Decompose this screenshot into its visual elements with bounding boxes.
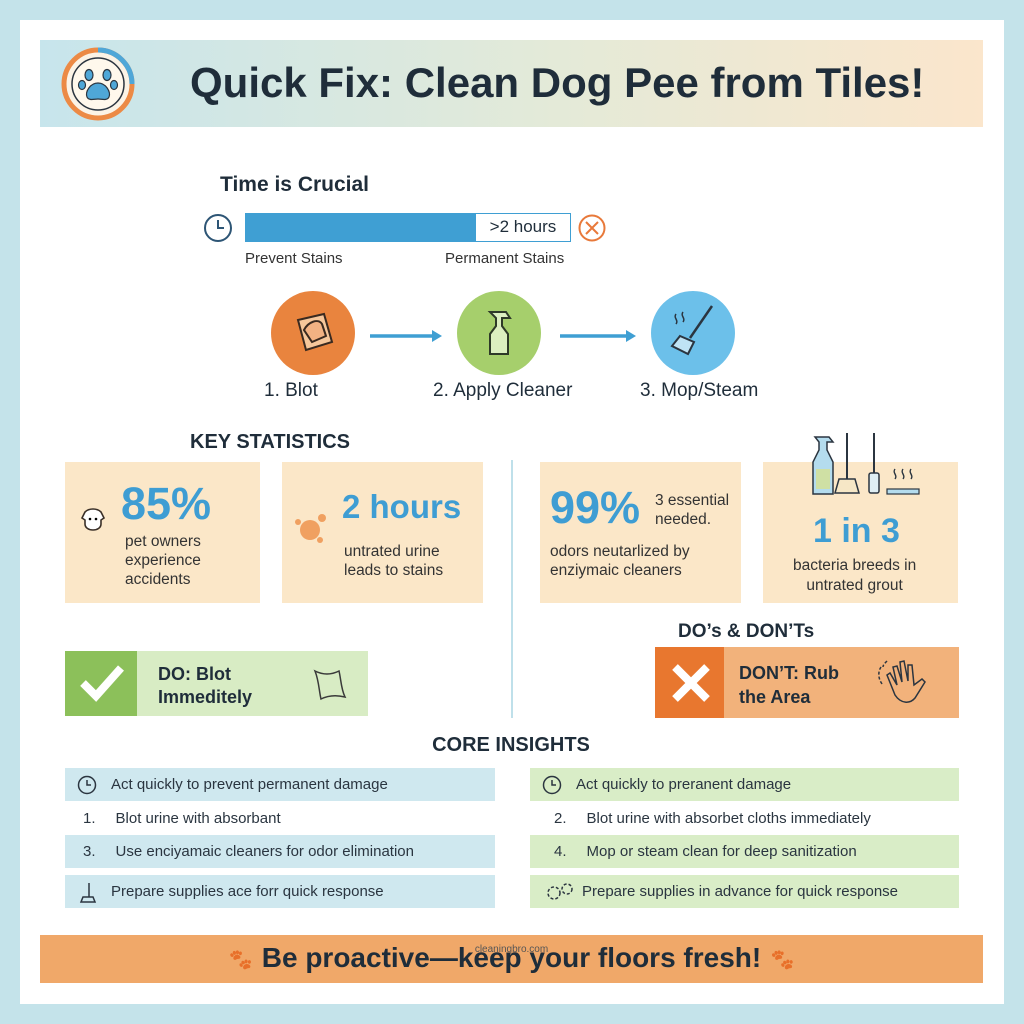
stat card 2 hours: untrated urine: [344, 543, 440, 560]
labels: Prevent Stains: [245, 250, 343, 267]
stat card 2 hours: 2 hours: [342, 488, 461, 525]
insights left column: Act quickly to prevent permanent damage: [111, 776, 388, 793]
insights left column: 3.: [83, 843, 96, 860]
stat card 1 in 3: untrated grout: [806, 577, 903, 594]
stat card 2 hours: leads to stains: [344, 562, 443, 579]
do box: DO: Blot: [158, 664, 231, 684]
heading: Time is Crucial: [220, 173, 369, 196]
arrow: [560, 330, 636, 342]
insights right column: Blot urine with absorbet cloths immediately: [587, 810, 871, 827]
stat card 85%: [65, 462, 260, 603]
insights left column: 1.: [83, 810, 96, 827]
core insights heading: CORE INSIGHTS: [432, 734, 590, 756]
stat card 85%: pet owners: [125, 533, 201, 550]
step 3 mop/steam: [640, 291, 758, 401]
timeline bar: [245, 213, 571, 242]
footer banner: cleaningbro.com: [475, 944, 548, 955]
stat card 1 in 3: [763, 462, 958, 603]
divider: [511, 460, 513, 718]
arrow: [370, 330, 442, 342]
stat card 99%: odors neutarlized by: [550, 543, 690, 560]
dont box: [655, 647, 959, 718]
dos and donts heading: DO’s & DON’Ts: [678, 621, 814, 642]
insights left column: [65, 768, 495, 908]
stat card 99%: 99%: [550, 482, 640, 533]
stat card 1 in 3: bacteria breeds in: [793, 557, 916, 574]
icon: clock: [204, 214, 232, 242]
stat card 85%: accidents: [125, 571, 190, 588]
key statistics heading: KEY STATISTICS: [190, 431, 350, 453]
insights right column: Mop or steam clean for deep sanitization: [587, 843, 857, 860]
insights right column: [530, 768, 959, 908]
time is crucial: Permanent Stains: [445, 250, 564, 267]
step 2 apply cleaner: [433, 291, 572, 401]
step 3 mop/steam: 3. Mop/Steam: [640, 380, 758, 401]
stat card 99%: 3 essential: [655, 492, 729, 509]
stat card 99%: enziymaic cleaners: [550, 562, 682, 579]
do box: Immeditely: [158, 687, 252, 707]
time is crucial: [204, 173, 606, 267]
step 1 blot: [264, 291, 355, 401]
header banner: [40, 40, 983, 127]
stat card 99%: [540, 462, 741, 603]
footer banner: 🐾︎ Be proactive—keep your floors fresh! 🐾︎: [227, 942, 796, 973]
icon: cleaning supplies: [812, 433, 920, 495]
dont box: DON’T: Rub: [739, 663, 839, 683]
insights left column: Blot urine with absorbant: [116, 810, 281, 827]
insights right column: Prepare supplies in advance for quick response: [582, 883, 898, 900]
footer banner: [40, 935, 983, 983]
process steps: [264, 291, 758, 401]
stat card 99%: needed.: [655, 511, 711, 528]
timeline bar: >2 hours: [490, 217, 556, 236]
do box: [65, 651, 368, 716]
stat card 2 hours: [282, 462, 483, 603]
icon: paw badge: [62, 48, 134, 120]
icon: x circle: [578, 214, 606, 242]
step 1 blot: 1. Blot: [264, 380, 318, 401]
stat card 85%: 85%: [121, 478, 211, 529]
insights right column: Act quickly to preranent damage: [576, 776, 791, 793]
step 2 apply cleaner: 2. Apply Cleaner: [433, 380, 572, 401]
dont box: the Area: [739, 687, 810, 707]
insights left column: Use enciyamaic cleaners for odor elimination: [116, 843, 414, 860]
stat card 85%: experience: [125, 552, 201, 569]
insights left column: Prepare supplies ace forr quick response: [111, 883, 384, 900]
stat card 1 in 3: 1 in 3: [813, 512, 900, 550]
insights right column: 4.: [554, 843, 567, 860]
insights right column: 2.: [554, 810, 567, 827]
title: Quick Fix: Clean Dog Pee from Tiles!: [190, 59, 924, 106]
